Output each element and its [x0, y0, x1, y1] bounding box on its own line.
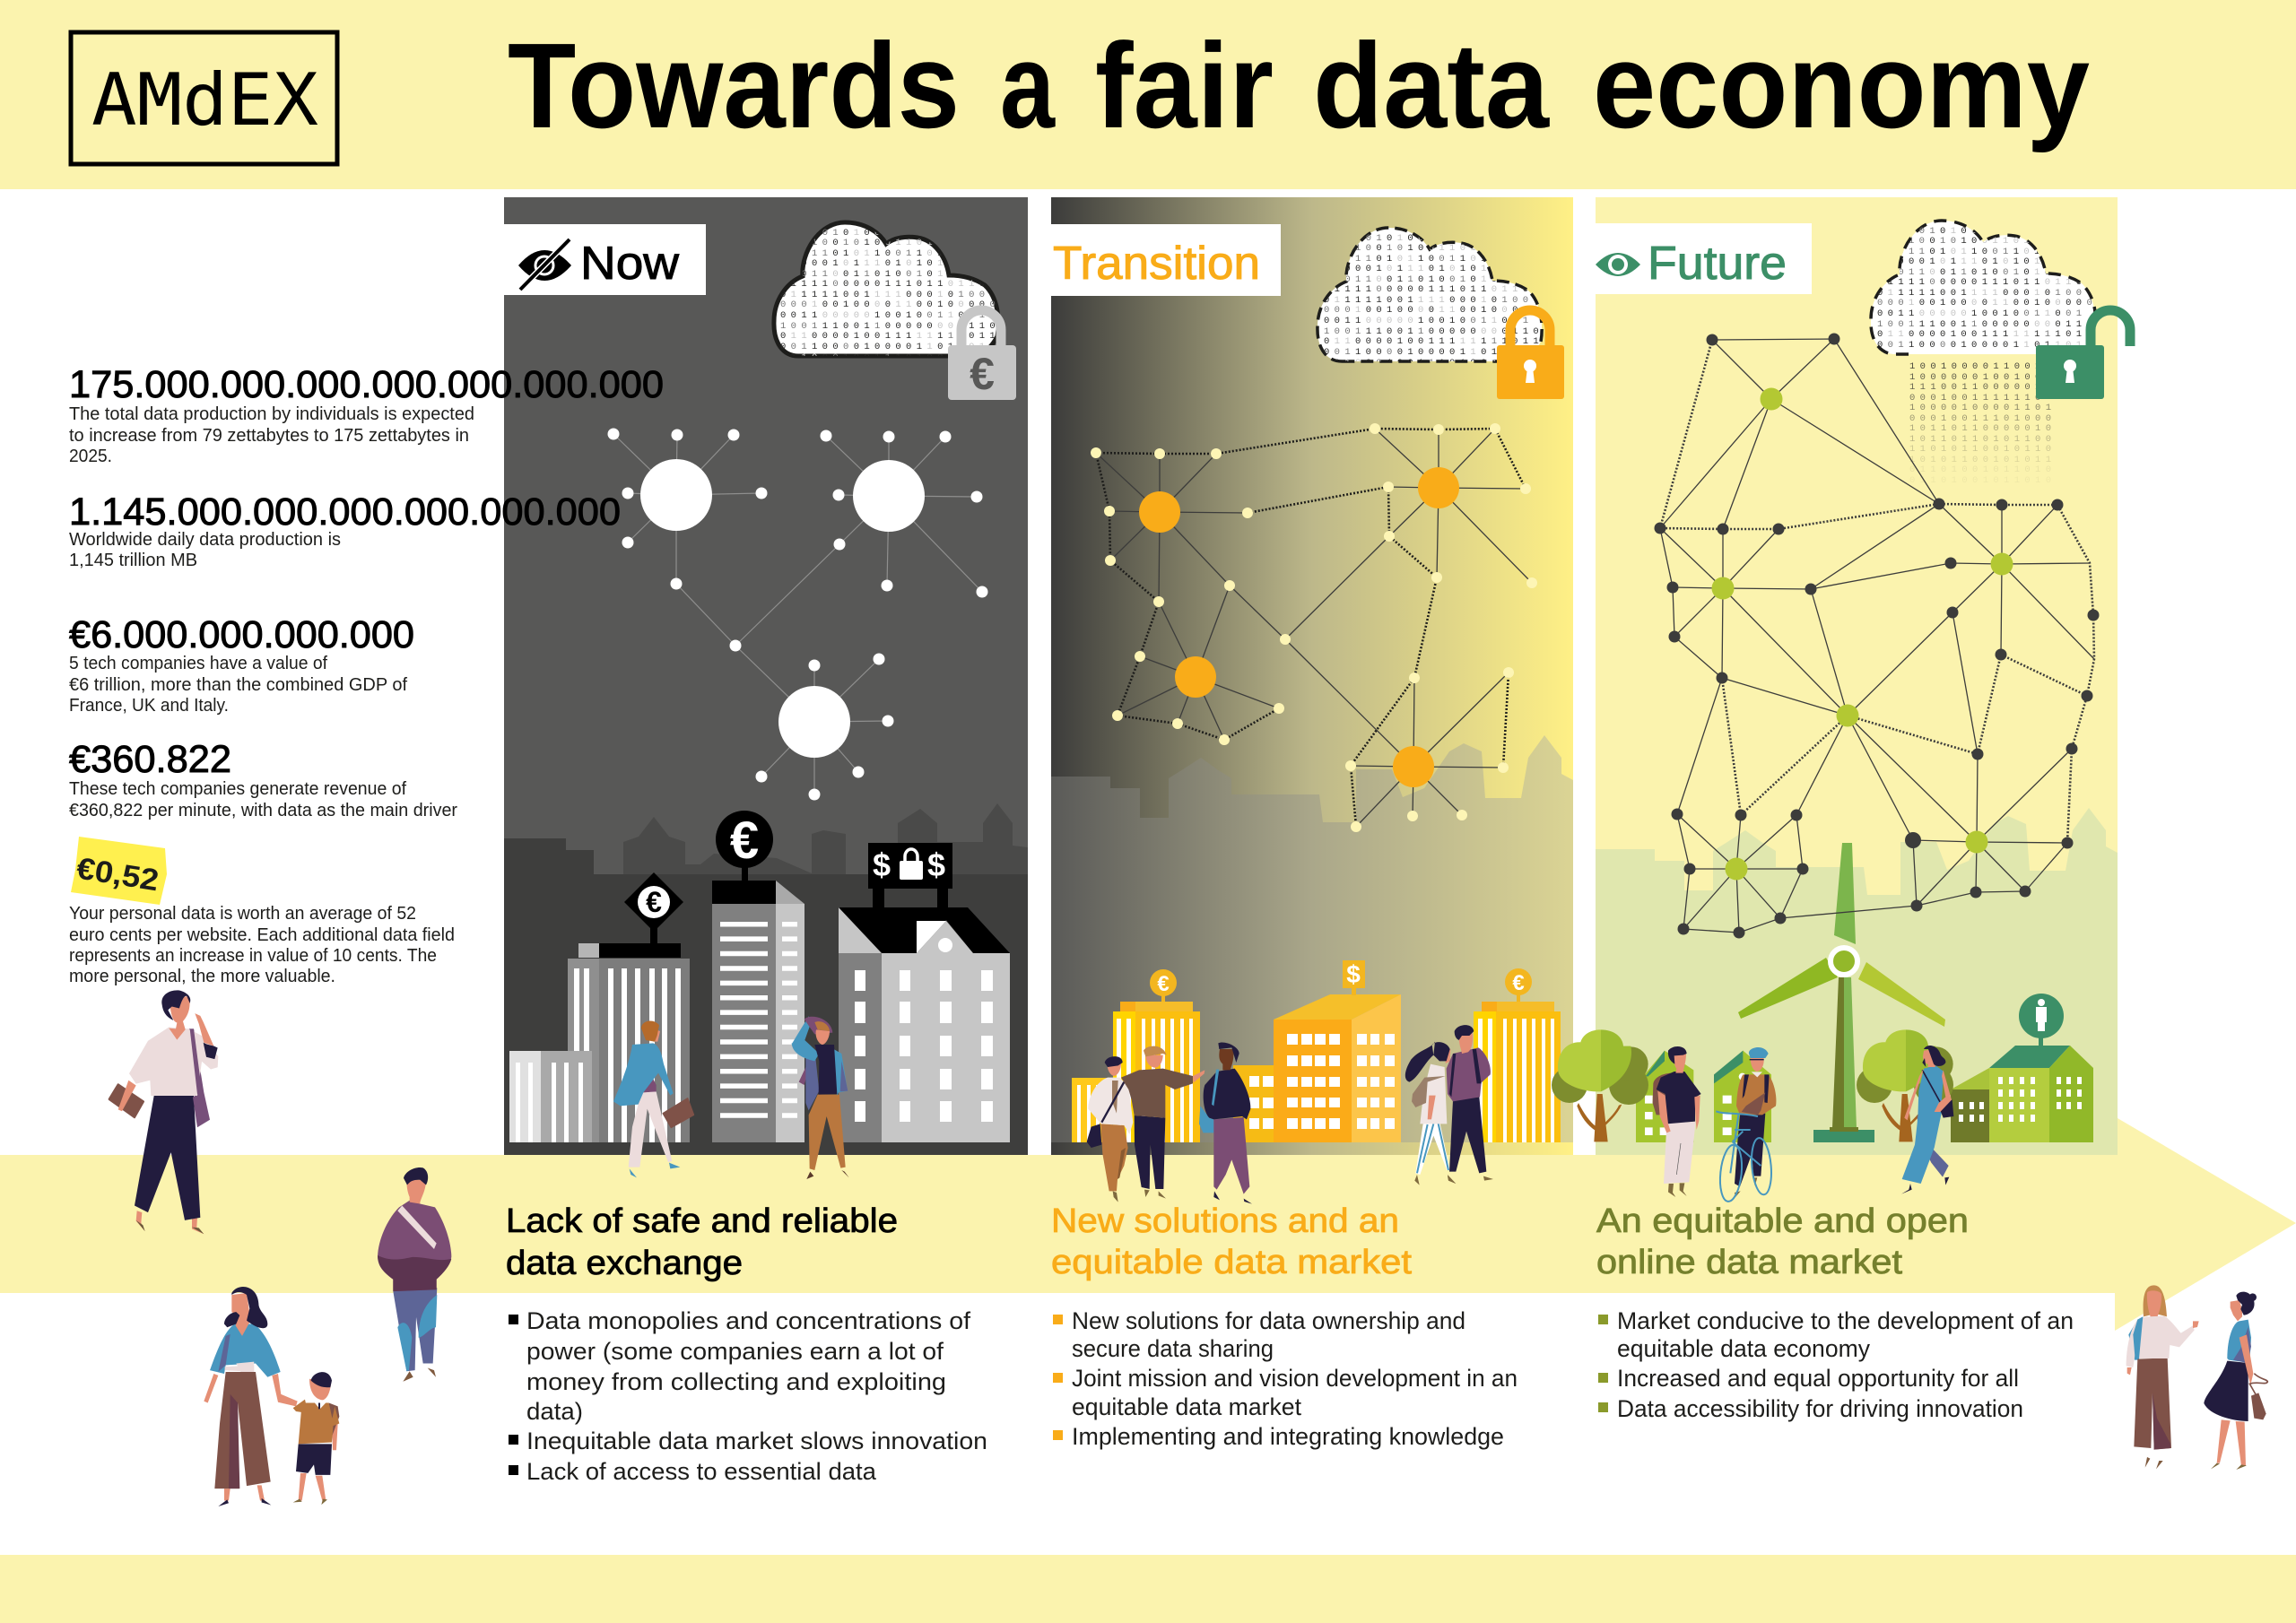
- transition bullet list: New solutions for data ownership and: [1072, 1307, 1465, 1334]
- icon: closed data cloud: 01111000001110110110: [780, 279, 989, 290]
- now subheading: Lack of safe and reliable: [506, 1202, 898, 1240]
- column: now text: [506, 1202, 987, 1485]
- stat: daily data: Worldwide daily data production is: [69, 530, 341, 550]
- transition bullet list: equitable data market: [1072, 1393, 1301, 1420]
- person: woman gesturing: [2126, 1285, 2199, 1469]
- logo: AMdEX: [91, 58, 318, 142]
- footer band: [0, 1555, 2296, 1623]
- stat: personal data text: Your personal data is worth an average of 52: [69, 904, 416, 924]
- title: [508, 18, 2090, 153]
- stat: tech value: €6 trillion, more than the combined GDP of: [69, 675, 407, 695]
- icon: open data cloud: 01101001011010: [1909, 475, 2056, 486]
- icon: dashed data cloud: 01111100111100010100: [1324, 295, 1533, 306]
- icon: closed data cloud: 00110000100001101101: [780, 342, 989, 352]
- tree left: [1552, 1029, 1648, 1141]
- future bullet list: Market conducive to the development of an: [1617, 1307, 2074, 1334]
- future bullet list: Data accessibility for driving innovation: [1617, 1395, 2023, 1422]
- icon: open data cloud: 1000000100100: [1909, 372, 2046, 383]
- icon: open data cloud: 01111100111100010100: [1877, 288, 2086, 299]
- panel: future: [1596, 197, 2130, 1155]
- icon: open data cloud: 10000101110101010110: [1877, 256, 2086, 267]
- person: transition girl with ponytail: [1405, 1042, 1456, 1185]
- stat: personal data tag: [71, 837, 167, 905]
- now bullet list: money from collecting and exploiting: [526, 1368, 946, 1395]
- transition subheading: [1051, 1202, 1412, 1281]
- person: future man in black tee: [1653, 1046, 1701, 1197]
- icon: open data cloud: 10110110000010: [1909, 423, 2056, 434]
- person: man in purple hoodie: [378, 1167, 451, 1382]
- transition buildings: €: [1157, 972, 1170, 996]
- now bullet list: Data monopolies and concentrations of: [526, 1307, 971, 1334]
- icon: open data cloud: 10011001101001010110: [1877, 267, 2086, 278]
- stat: tech value: €6.000.000.000.000: [69, 613, 414, 656]
- transition bullet list: secure data sharing: [1072, 1335, 1274, 1362]
- icon: open data cloud: 011000010011111111011: [1877, 329, 2097, 340]
- icon: dashed data cloud: 00110000010010011001: [1324, 316, 1533, 326]
- future skyline: [1596, 808, 2118, 1155]
- future buildings: [1636, 994, 2093, 1142]
- transition buildings: $: [1346, 960, 1361, 988]
- now subheading: data exchange: [506, 1245, 743, 1282]
- stat: daily data: [69, 490, 621, 570]
- person: woman with bag and book: [109, 990, 218, 1234]
- icon: open data cloud: 100111001100000000110: [1877, 319, 2097, 330]
- now heading: Now: [580, 238, 679, 290]
- stat: tech revenue: €360.822: [69, 738, 231, 781]
- stat: total data: The total data production by individuals is expected: [69, 404, 474, 424]
- header band: [0, 0, 2296, 189]
- icon: closed data cloud: 10000101110101010110: [780, 258, 989, 269]
- now bullet list: data): [526, 1398, 583, 1425]
- icon: closed data cloud: 00110000010010011001: [780, 310, 989, 321]
- icon: orange padlock: [1497, 310, 1564, 399]
- person: transition man pointing: [1121, 1046, 1205, 1199]
- icon: closed data cloud: 01010010100110101001: [780, 238, 989, 248]
- icon: closed data cloud: 011000010011111111011: [780, 331, 1000, 342]
- stat: personal data text: [69, 904, 455, 986]
- icon: closed data cloud: [774, 222, 1011, 363]
- now bullet list: Lack of access to essential data: [526, 1458, 877, 1485]
- logo: [71, 32, 337, 164]
- person: man with hand on head: [792, 1016, 849, 1179]
- network: transition: [1091, 423, 1537, 832]
- icon: open eye: [1596, 253, 1640, 276]
- stat: tech value: 5 tech companies have a value of: [69, 654, 327, 673]
- transition subheading: New solutions and an: [1051, 1202, 1399, 1240]
- person: child: [293, 1372, 339, 1505]
- icon: euro padlock: [948, 310, 1016, 400]
- future bullet list: equitable data economy: [1617, 1335, 1870, 1362]
- now buildings: [509, 811, 1010, 1142]
- icon: open data cloud: 01101001011010: [1909, 464, 2056, 475]
- now buildings: $: [873, 846, 891, 883]
- icon: dashed data cloud: 01011010110011010100: [1324, 254, 1533, 265]
- icon: dashed data cloud: 1001010100110101001: [1324, 233, 1523, 244]
- stat: daily data: 1.145.000.000.000.000.000.000: [69, 490, 621, 534]
- now label: [504, 224, 706, 295]
- title: Towards: [508, 18, 960, 153]
- title: economy: [1593, 18, 2090, 153]
- stat: tech revenue: [69, 738, 457, 820]
- future subheading: [1596, 1202, 1969, 1281]
- icon: open data cloud: 00010011101000: [1909, 413, 2056, 424]
- icon: dashed data cloud: 100111001100000000110: [1324, 326, 1544, 337]
- now buildings: €: [646, 886, 662, 918]
- stat: personal data text: represents an increase in value of 10 cents. The: [69, 946, 437, 966]
- stat: daily data: 1,145 trillion MB: [69, 551, 197, 570]
- stat: tech value: France, UK and Italy.: [69, 696, 229, 716]
- title: data: [1313, 18, 1550, 153]
- icon: dashed data cloud: 10011001101001010110: [1324, 274, 1533, 285]
- transition label: [1051, 224, 1281, 296]
- icon: crossed-out eye: [518, 239, 571, 290]
- icon: open data cloud: 11010110010110: [1909, 444, 2056, 455]
- person: mother: [204, 1287, 298, 1506]
- now subheading: [506, 1202, 898, 1282]
- transition bullet list: Implementing and integrating knowledge: [1072, 1423, 1504, 1450]
- icon: open data cloud: 01011010110011010100: [1877, 247, 2086, 257]
- icon: closed data cloud: 01011010110011010100: [780, 248, 989, 259]
- network: centralised hubs: [608, 429, 988, 800]
- transition label: Transition: [1053, 238, 1260, 290]
- person: woman in navy skirt: [2204, 1292, 2267, 1470]
- icon: open data cloud: 1001010100110101001: [1877, 226, 2076, 237]
- stat: total data: 175.000.000.000.000.000.000.000: [69, 363, 664, 406]
- stat: tech value: [69, 613, 414, 716]
- icon: open data cloud: 00110000010010011001: [1877, 308, 2086, 319]
- icon: dashed data cloud: 0110001001110100110: [1324, 358, 1523, 369]
- stat: personal data text: euro cents per website. Each additional data field: [69, 925, 455, 945]
- future subheading: An equitable and open: [1596, 1202, 1969, 1240]
- icon: open data cloud: 10000100001101: [1909, 403, 2056, 413]
- icon: dashed data cloud: 10000101110101010110: [1324, 264, 1533, 274]
- tree right: [1857, 1029, 1953, 1141]
- column: transition text: [1051, 1202, 1518, 1450]
- icon: dashed data cloud: 0001001000011001000001: [1324, 305, 1554, 316]
- icon: dashed data cloud: [1318, 228, 1554, 369]
- stat: total data: to increase from 79 zettabytes to 175 zettabytes in: [69, 426, 469, 446]
- icon: open data cloud: 1001000011001: [1909, 361, 2046, 372]
- future heading: Future: [1648, 238, 1787, 290]
- icon: open data cloud: 01111000001110110110: [1877, 277, 2086, 288]
- title: fair: [1095, 18, 1274, 153]
- person: transition man in navy: [1199, 1042, 1252, 1204]
- now bullet list: Inequitable data market slows innovation: [526, 1428, 987, 1454]
- panel: transition: [1051, 197, 1573, 1155]
- stats column: [69, 363, 664, 986]
- stat: personal data text: more personal, the more valuable.: [69, 967, 335, 986]
- icon: open data cloud: 0001001111110: [1909, 393, 2046, 404]
- title: a: [1000, 18, 1056, 153]
- person: walker with briefcase: [613, 1021, 693, 1177]
- transition buildings: €: [1512, 971, 1525, 995]
- now buildings: $: [927, 846, 945, 883]
- icon: open data cloud: 10110110101100: [1909, 434, 2056, 445]
- future subheading: online data market: [1596, 1244, 1902, 1281]
- now buildings: €: [730, 812, 759, 870]
- column: future text: [1596, 1202, 2074, 1422]
- icon: closed data cloud: 10011001101001010110: [780, 269, 989, 280]
- icon: dashed data cloud: 01111000001110110110: [1324, 284, 1533, 295]
- icon: closed data cloud: 01111100111100010100: [780, 290, 989, 300]
- stat: total data: [69, 363, 664, 466]
- icon: open green padlock: [2036, 310, 2130, 399]
- icon: dashed data cloud: 01010010100110101001: [1324, 243, 1533, 254]
- stat: tech revenue: These tech companies generate revenue of: [69, 779, 406, 799]
- icon: open data cloud: 10101100101011: [1909, 455, 2056, 465]
- stat: total data: 2025.: [69, 447, 112, 466]
- icon: euro padlock: €: [970, 349, 995, 399]
- transition bullet list: [1053, 1307, 1518, 1450]
- person: transition man with satchel: [1087, 1056, 1133, 1202]
- now bullet list: power (some companies earn a lot of: [526, 1338, 944, 1365]
- icon: open data cloud: 0001001000011001000001: [1877, 298, 2108, 308]
- icon: open data cloud: 00110000100001101101: [1877, 340, 2086, 351]
- transition skyline: [1051, 735, 1573, 1142]
- icon: closed data cloud: 100111001100000000110: [780, 321, 1000, 332]
- icon: dashed data cloud: 011000010011111111011: [1324, 336, 1544, 347]
- stat: tech revenue: €360,822 per minute, with data as the main driver: [69, 801, 457, 820]
- transition bullet list: Joint mission and vision development in an: [1072, 1365, 1518, 1392]
- icon: closed data cloud: 1001010100110101001: [780, 228, 979, 239]
- person: future woman in blue: [1901, 1046, 1953, 1194]
- future bullet list: Increased and equal opportunity for all: [1617, 1365, 2019, 1392]
- icon: closed data cloud: 0110001001110100110: [780, 352, 979, 363]
- person: transition man with backpack: [1447, 1025, 1493, 1184]
- icon: open data cloud: 1110011000001: [1909, 382, 2046, 393]
- future label: [1596, 223, 1812, 294]
- now bullet list: [509, 1307, 987, 1485]
- icon: open data cloud: [1871, 221, 2108, 486]
- transition buildings: [1072, 960, 1561, 1142]
- person: future cyclist: [1716, 1047, 1776, 1202]
- icon: dashed data cloud: 00110000100001101101: [1324, 347, 1533, 358]
- panel: now: [504, 197, 1028, 1155]
- arrow band: [0, 1118, 2296, 1331]
- network: future: [1654, 334, 2099, 938]
- icon: closed data cloud: 0001001000011001000001: [780, 299, 1011, 310]
- now skyline foreground: [504, 838, 1028, 1155]
- transition subheading: equitable data market: [1051, 1244, 1412, 1281]
- icon: open data cloud: 01010010100110101001: [1877, 236, 2086, 247]
- now skyline: [504, 803, 1028, 1155]
- wind turbine: [1738, 843, 1945, 1142]
- stat: personal data tag: €0,52: [74, 851, 161, 898]
- future bullet list: [1598, 1307, 2074, 1422]
